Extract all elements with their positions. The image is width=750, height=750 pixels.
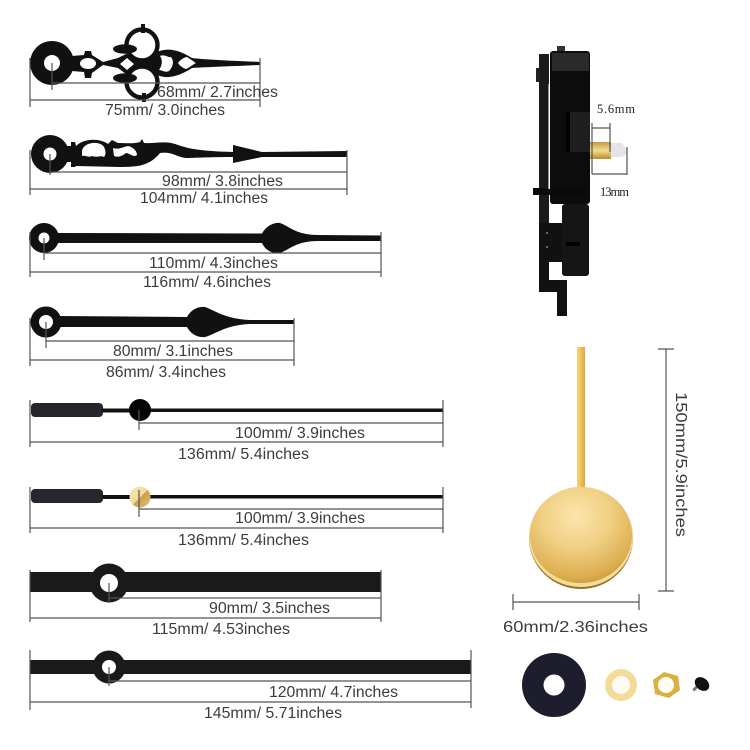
label: 60mm: 60mm/2.36inches	[503, 619, 648, 636]
ornate hand shape	[30, 24, 260, 102]
movement body	[533, 46, 590, 316]
label: 136mm: 136mm/ 5.4inches	[178, 446, 309, 463]
second hand shape	[31, 399, 443, 421]
label: 80mm: 80mm/ 3.1inches	[113, 343, 233, 360]
dimension lines	[30, 150, 347, 195]
label: 13mm: 13mm	[600, 185, 629, 199]
hand 6: second hand with gold cap	[30, 486, 443, 549]
hand 1: ornate 75mm	[30, 24, 278, 119]
label: 110mm: 110mm/ 4.3inches	[149, 255, 278, 272]
label: 104mm: 104mm/ 4.1inches	[140, 190, 268, 207]
dimension lines	[30, 232, 381, 277]
black rubber washer	[522, 653, 586, 717]
label: 145mm: 145mm/ 5.71inches	[204, 705, 342, 722]
bar hand shape	[30, 650, 471, 684]
arrow hand shape	[31, 135, 347, 173]
hand 4: spade 86mm	[30, 306, 294, 381]
stem dimension lines	[592, 123, 627, 175]
dimension lines	[30, 650, 471, 710]
label: 98mm: 98mm/ 3.8inches	[162, 173, 283, 190]
label: 75mm: 75mm/ 3.0inches	[105, 102, 225, 119]
spade hand shape	[29, 223, 381, 253]
clock movement side view	[533, 46, 635, 316]
hand 8: wide bar 145mm	[30, 650, 471, 722]
gold hex nut	[653, 672, 680, 698]
gold washer	[605, 669, 637, 701]
second hand shape	[31, 486, 443, 508]
dimension lines	[30, 487, 443, 533]
label: 116mm: 116mm/ 4.6inches	[143, 274, 271, 291]
hand 2: ornate 104mm with arrow	[30, 135, 347, 207]
dimension lines	[30, 318, 294, 366]
pendulum	[503, 347, 689, 636]
label: 86mm: 86mm/ 3.4inches	[106, 364, 226, 381]
label: 100mm: 100mm/ 3.9inches	[235, 425, 365, 442]
label: 5.6mm: 5.6mm	[597, 102, 635, 116]
hand 7: wide bar 115mm	[30, 564, 381, 638]
width dimension	[513, 594, 639, 610]
pendulum bob	[529, 487, 633, 589]
height dimension	[658, 349, 674, 591]
label: 120mm: 120mm/ 4.7inches	[269, 684, 398, 701]
small hardware parts	[522, 653, 712, 717]
dimension lines	[30, 400, 443, 447]
label: 100mm: 100mm/ 3.9inches	[235, 510, 365, 527]
hand 5: second hand with black cap	[30, 399, 443, 463]
dimension lines	[30, 58, 260, 107]
bar hand shape	[30, 564, 381, 602]
spade hand shape	[30, 306, 294, 338]
label: 150mm: 150mm/5.9inches	[672, 392, 689, 537]
small black screw	[692, 674, 712, 694]
dimension lines	[30, 570, 381, 622]
hand 3: spade 116mm	[29, 223, 381, 291]
label: 115mm: 115mm/ 4.53inches	[152, 621, 290, 638]
pendulum rod	[577, 347, 585, 492]
label: 136mm: 136mm/ 5.4inches	[178, 532, 309, 549]
threaded gold stem	[590, 142, 627, 159]
label: 68mm: 68mm/ 2.7inches	[157, 84, 278, 101]
label: 90mm: 90mm/ 3.5inches	[209, 600, 330, 617]
